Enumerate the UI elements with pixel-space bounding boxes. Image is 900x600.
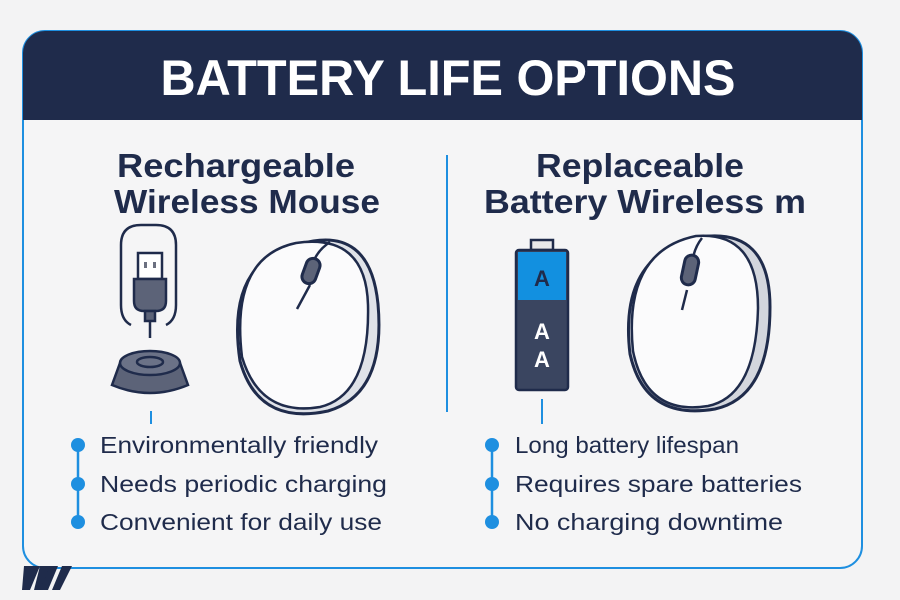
title: BATTERY LIFE OPTIONS (160, 50, 736, 106)
icon: AA battery: A (534, 266, 550, 291)
icon: AA battery: A (534, 347, 550, 372)
heading: rechargeable (114, 147, 380, 220)
bullets: replaceable: Requires spare batteries (515, 471, 802, 497)
bullets: rechargeable: Needs periodic charging (100, 471, 387, 497)
heading: replaceable: Replaceable (536, 147, 744, 184)
header bar (23, 31, 862, 120)
bullets: rechargeable (71, 432, 387, 535)
icon: AA battery (516, 240, 568, 390)
icon: AA battery: A (534, 319, 550, 344)
bullets: replaceable: No charging downtime (515, 509, 783, 535)
heading: replaceable (484, 147, 806, 220)
bullets: rechargeable: Convenient for daily use (100, 509, 382, 535)
logo (22, 566, 72, 590)
icon: mouse right (628, 236, 770, 411)
bullets: rechargeable: Environmentally friendly (100, 432, 379, 458)
icon: usb charger (112, 225, 188, 393)
icon: mouse left (238, 240, 379, 414)
heading: replaceable: Battery Wireless m (484, 183, 806, 220)
bullets: replaceable: Long battery lifespan (515, 432, 739, 458)
bullets: replaceable (485, 432, 802, 535)
heading: rechargeable: Wireless Mouse (114, 183, 380, 220)
divider (446, 155, 448, 412)
heading: rechargeable: Rechargeable (117, 147, 355, 184)
